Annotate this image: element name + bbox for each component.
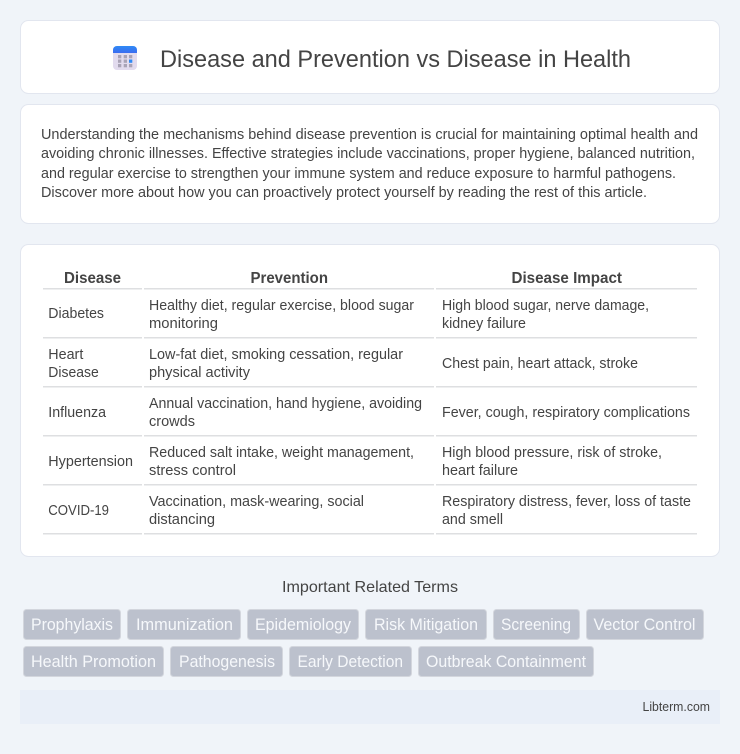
table row: Hypertension <box>43 445 697 486</box>
tag: Epidemiology <box>248 610 358 640</box>
table header row: Disease <box>64 270 121 287</box>
table row: Influenza: Influenza <box>48 405 107 421</box>
table row: Heart Disease <box>43 347 697 388</box>
table row: COVID-19 <box>43 494 697 534</box>
tag: Health Promotion <box>24 646 164 676</box>
icon: calendar <box>113 46 137 70</box>
text block: introduction paragraph: avoiding chronic illnesses. Effective strategies include vaccinations, proper hygiene, balanced nutrition, <box>41 146 695 162</box>
table row: Diabetes: High blood sugar, nerve damage, <box>442 298 649 314</box>
table row: Hypertension: High blood pressure, risk of stroke, <box>442 445 662 461</box>
panel: title header <box>20 20 720 94</box>
table row: Hypertension: Hypertension <box>48 454 133 470</box>
panel: related term tags <box>24 610 704 676</box>
text block: introduction paragraph: Discover more about how you can proactively protect yourself by reading the rest of this article. <box>41 185 647 201</box>
text block: introduction paragraph: Understanding the mechanisms behind disease prevention is crucial for maintaining optimal health and <box>41 127 698 143</box>
table row: Influenza: crowds <box>149 414 195 430</box>
tag: Risk Mitigation: Risk Mitigation <box>374 616 478 634</box>
tag: Pathogenesis: Pathogenesis <box>179 653 275 671</box>
table row: COVID-19: Vaccination, mask-wearing, social <box>149 494 364 510</box>
table header row: Prevention <box>250 270 328 287</box>
tag: Risk Mitigation <box>366 610 486 640</box>
panel: introduction <box>20 104 720 224</box>
title: Disease and Prevention vs Disease in Health <box>160 46 631 73</box>
table row: Influenza: Fever, cough, respiratory complications <box>442 405 690 421</box>
tag: Vector Control: Vector Control <box>594 616 696 634</box>
table row: Diabetes: Diabetes <box>48 306 104 322</box>
tag: Screening: Screening <box>501 616 571 634</box>
tag: Early Detection: Early Detection <box>298 653 403 671</box>
table row: Diabetes: monitoring <box>149 316 218 332</box>
table row: Heart Disease: Chest pain, heart attack, stroke <box>442 356 638 372</box>
footer: Libterm.com <box>642 700 710 714</box>
table row: Diabetes: kidney failure <box>442 316 526 332</box>
footer <box>20 690 720 724</box>
tag: Prophylaxis <box>24 610 120 640</box>
table row: Diabetes: Healthy diet, regular exercise, blood sugar <box>149 298 414 314</box>
table header row: Disease Impact <box>512 270 622 287</box>
tag: Pathogenesis <box>170 646 282 676</box>
table row: Hypertension: heart failure <box>442 463 518 479</box>
table row: Hypertension: Reduced salt intake, weight management, <box>149 445 414 461</box>
tag: Outbreak Containment: Outbreak Containment <box>426 653 586 671</box>
table header row <box>43 270 697 290</box>
heading: related terms: Important Related Terms <box>282 579 458 596</box>
table row: Influenza: Annual vaccination, hand hygiene, avoiding <box>149 396 422 412</box>
tag: Immunization: Immunization <box>136 616 233 634</box>
tag: Screening <box>494 610 580 640</box>
text block: introduction paragraph: and regular exercise to strengthen your immune system and reduce exposure to harmful pathogens. <box>41 166 676 182</box>
tag: Vector Control <box>586 610 704 640</box>
text block: introduction paragraph <box>41 127 698 201</box>
table row: Heart Disease: physical activity <box>149 365 251 381</box>
tag: Outbreak Containment <box>418 646 594 676</box>
table row: COVID-19: and smell <box>442 512 503 528</box>
tag: Immunization <box>128 610 240 640</box>
table row: COVID-19: COVID-19 <box>48 503 109 519</box>
table row: Diabetes <box>43 298 697 338</box>
table row: Heart Disease: Low-fat diet, smoking cessation, regular <box>149 347 403 363</box>
tag: Early Detection <box>290 646 412 676</box>
table row: COVID-19: Respiratory distress, fever, loss of taste <box>442 494 691 510</box>
table row: Heart Disease: Heart <box>48 347 83 363</box>
table row: COVID-19: distancing <box>149 512 215 528</box>
table row: Hypertension: stress control <box>149 463 236 479</box>
tag: Prophylaxis: Prophylaxis <box>31 616 113 634</box>
tag: Epidemiology: Epidemiology <box>255 616 352 634</box>
panel: comparison table <box>20 244 720 556</box>
table row: Influenza <box>43 396 697 436</box>
table row: Heart Disease: Disease <box>48 365 99 381</box>
tag: Health Promotion: Health Promotion <box>31 653 156 671</box>
